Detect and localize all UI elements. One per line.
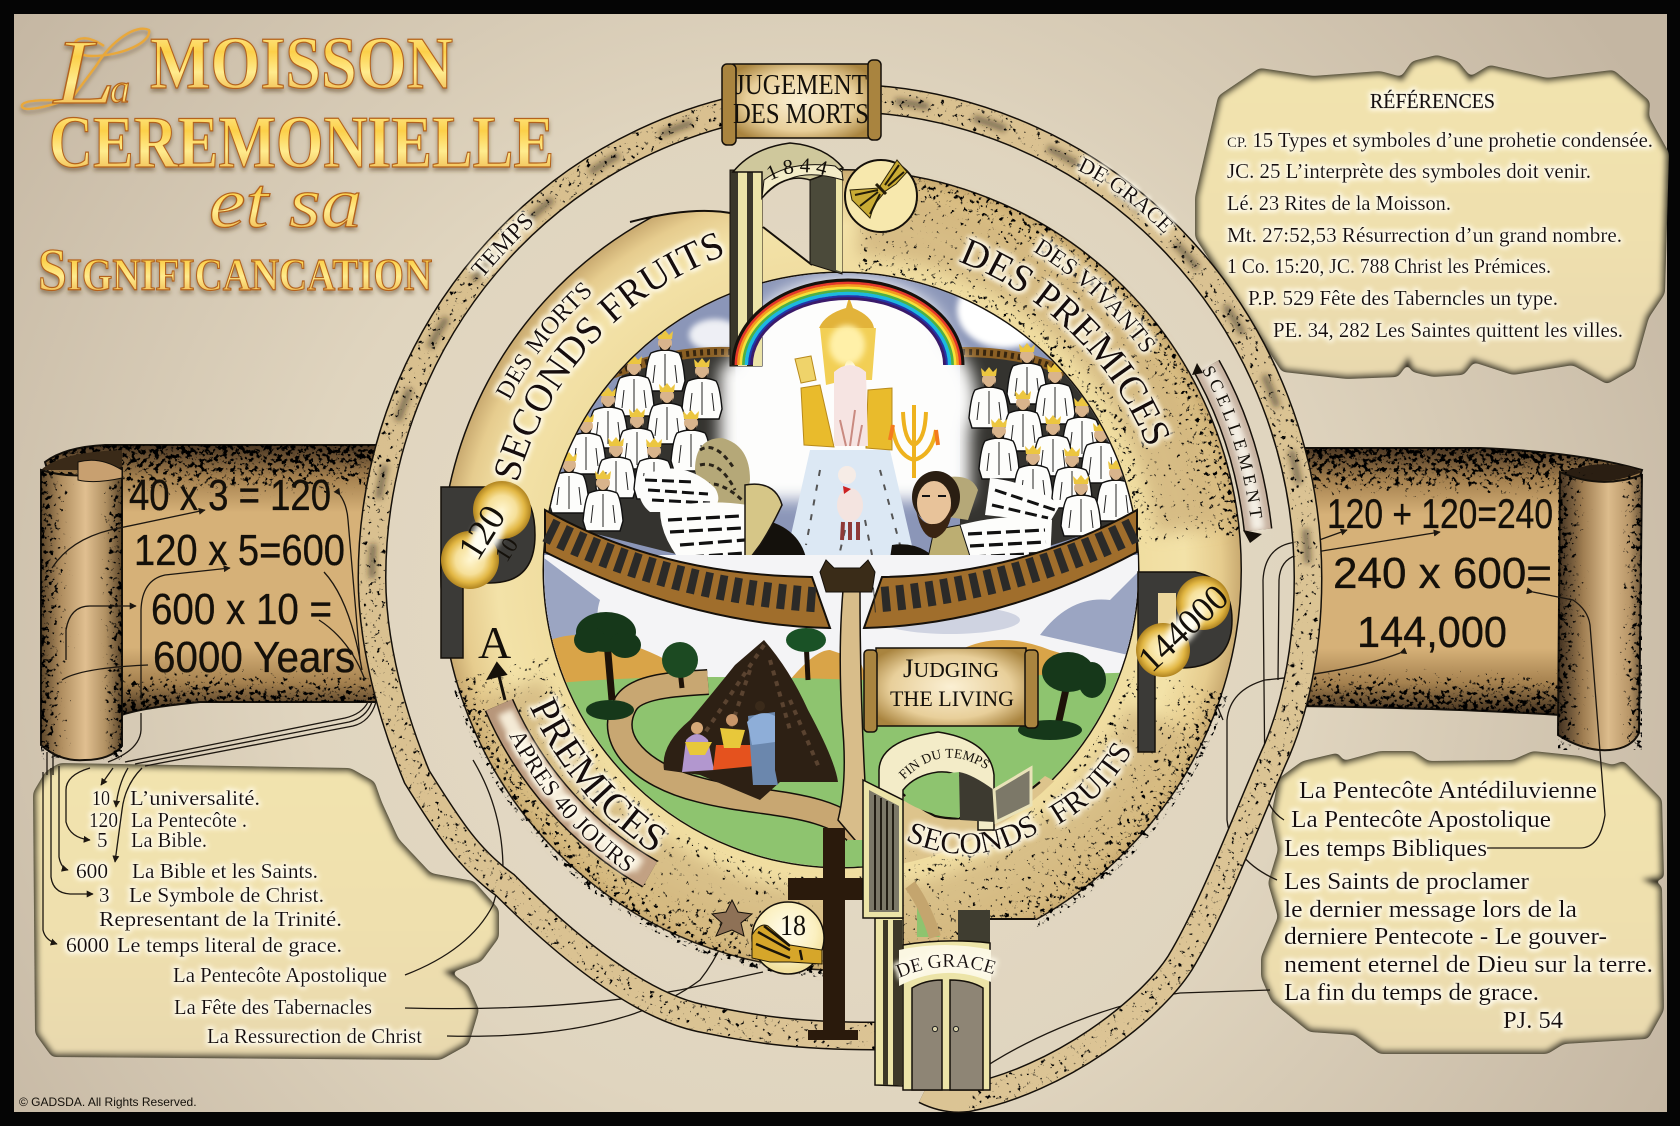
panel: references: PE. 34, 282 Les Saintes quittent les villes. xyxy=(1273,318,1623,342)
sky upper xyxy=(540,270,1150,570)
people at the hut xyxy=(682,701,778,785)
icon: wheat sheaf circle xyxy=(845,160,917,232)
star marker xyxy=(712,900,752,936)
letter P left with coins: 10 xyxy=(490,533,523,566)
panel: left key: La Bible et les Saints. xyxy=(132,859,318,883)
upper railings xyxy=(612,352,1065,374)
scroll: judging the living: THE LIVING xyxy=(890,686,1014,711)
cross xyxy=(788,828,863,1040)
scroll left: 120 x 5=600 xyxy=(134,526,345,575)
hut xyxy=(664,640,838,800)
icon: sheaf circle 18 xyxy=(752,902,824,974)
throne xyxy=(795,297,892,450)
dirt path xyxy=(620,682,862,838)
scroll: jugement des morts: JUGEMENT xyxy=(735,70,867,101)
scroll: judging the living: JUDGING xyxy=(903,654,999,683)
band labels: DES MORTS xyxy=(490,278,596,404)
inner harvest band xyxy=(492,170,1190,1004)
white glory cloud xyxy=(720,278,976,500)
central trunk xyxy=(838,590,872,860)
panel: left key: 3 xyxy=(99,883,110,907)
title flourish on the script L xyxy=(22,29,149,109)
icon: sheaf circle 18: 18 xyxy=(780,909,806,942)
central scene xyxy=(540,262,1150,900)
panel: left key: Le Symbole de Christ. xyxy=(129,883,324,907)
gate: fin du temps: FIN DU TEMPS xyxy=(896,746,992,782)
elders right xyxy=(969,343,1136,536)
ribbon: apres 40 jours: APRES 40 JOURS xyxy=(504,728,638,876)
title: SIGNIFICANCATION xyxy=(38,237,432,303)
panel: left key: 6000 xyxy=(66,933,109,957)
letter P left with coins: 120 xyxy=(450,498,514,567)
panel: references: P.P. 529 Fête des Taberncles un type. xyxy=(1248,286,1558,310)
panel: references: Lé. 23 Rites de la Moisson. xyxy=(1227,191,1451,215)
scroll left: 40 x 3 = 120 xyxy=(129,471,331,520)
background gap under cross xyxy=(845,900,1040,1004)
outer ring labels xyxy=(467,152,1179,283)
gate: de grace with doors xyxy=(863,780,998,1090)
letter P left with coins xyxy=(441,481,535,658)
panel: references: 1 Co. 15:20, JC. 788 Christ les Prémices. xyxy=(1227,254,1551,278)
panel: right key: derniere Pentecote - Le gouver- xyxy=(1284,924,1607,950)
wings left xyxy=(640,438,783,555)
green near gate xyxy=(847,840,864,880)
panel: right key: nement eternel de Dieu sur la terre. xyxy=(1284,952,1653,978)
panel: left key: La Ressurection de Christ xyxy=(207,1024,422,1048)
palm trees xyxy=(574,612,1106,740)
balustrade right xyxy=(864,510,1137,628)
scroll: jugement des morts: DES MORTS xyxy=(733,99,869,130)
wings right and creature xyxy=(951,476,1059,555)
candlestick xyxy=(890,405,938,478)
panel: left key: Le temps literal de grace. xyxy=(117,933,342,957)
portrait xyxy=(912,471,970,555)
balustrade left xyxy=(545,510,830,628)
title: CEREMONIELLE xyxy=(49,102,554,184)
panel: left key xyxy=(35,765,497,1058)
panel: left key: Representant de la Trinité. xyxy=(99,907,342,931)
band labels: SECONDS FRUITS xyxy=(490,228,727,486)
scroll right: 144,000 xyxy=(1357,608,1507,657)
panel: right key: Les temps Bibliques xyxy=(1284,836,1487,862)
hills xyxy=(552,635,667,690)
scroll left: 600 x 10 = xyxy=(151,585,332,634)
gate: fin du temps xyxy=(879,732,1031,830)
panel: left key: 600 xyxy=(76,859,108,883)
scroll left xyxy=(41,445,385,760)
band labels: SECONDS xyxy=(904,811,1042,860)
connector lines xyxy=(43,495,1605,1083)
title: MOISSON xyxy=(150,23,453,105)
panel: left key: 5 xyxy=(97,828,108,852)
letter A: A xyxy=(478,617,511,668)
dark backdrops behind elders xyxy=(550,356,736,554)
outer ring labels: TEMPS xyxy=(465,208,538,280)
background gap in arch opening xyxy=(630,170,812,264)
letter P right with coins: 144000 xyxy=(1130,577,1236,679)
lower sky xyxy=(540,555,1150,690)
panel: references: Mt. 27:52,53 Résurrection d’un grand nombre. xyxy=(1227,223,1622,247)
title xyxy=(22,21,554,303)
lamb xyxy=(837,466,863,540)
pale crystal floor xyxy=(792,450,912,555)
panel: left key: La Fête des Tabernacles xyxy=(174,995,372,1019)
elders left xyxy=(549,330,722,531)
scroll right: 240 x 600= xyxy=(1333,549,1552,598)
band labels: DES PREMICES xyxy=(954,232,1174,449)
heading: references: RÉFÉRENCES xyxy=(1370,89,1495,113)
panel: references: JC. 25 L’interprète des symboles doit venir. xyxy=(1227,159,1591,183)
ribbon: apres 40 jours xyxy=(489,664,650,878)
panel: left key: L’universalité. xyxy=(130,786,260,810)
title: L xyxy=(52,21,116,123)
panel: left key: 10 xyxy=(92,786,110,810)
bottom right band curl xyxy=(903,776,1090,944)
panel: right key: La Pentecôte Antédiluvienne xyxy=(1299,778,1597,804)
letter P right with coins xyxy=(1130,572,1236,752)
title: et sa xyxy=(209,163,362,243)
panel: right key: La fin du temps de grace. xyxy=(1284,980,1539,1006)
panel: right key: le dernier message lors de la xyxy=(1284,897,1577,923)
band labels xyxy=(485,223,1179,861)
dark shadow patches xyxy=(754,522,928,555)
balustrade center gate xyxy=(820,560,875,592)
panel: right key: La Pentecôte Apostolique xyxy=(1291,807,1551,833)
panel: references: CP. 15 Types et symboles d’une prohetie condensée. xyxy=(1227,128,1653,152)
panel: left key: 120 xyxy=(89,808,118,832)
band labels: DES VIVANTS xyxy=(1029,234,1161,357)
panel: left key: La Bible. xyxy=(131,828,207,852)
panel: right key: Les Saints de proclamer xyxy=(1284,869,1529,895)
scroll right: 120 + 120=240 xyxy=(1327,490,1553,537)
panel: references xyxy=(1197,57,1667,382)
gate: 1844 arch: 1844 xyxy=(767,158,827,180)
scroll: judging the living xyxy=(864,648,1038,732)
panel: left key: La Pentecôte . xyxy=(131,808,247,832)
panel: right key xyxy=(1263,753,1662,1052)
gate: 1844 arch xyxy=(730,143,843,366)
title: a xyxy=(110,66,130,111)
copyright: © GADSDA. All Rights Reserved. xyxy=(19,1095,197,1109)
outer ring labels: DE GRACE xyxy=(1074,152,1178,238)
band labels: PREMICES xyxy=(526,692,670,856)
panel: right key: PJ. 54 xyxy=(1503,1008,1563,1034)
band labels: FRUITS xyxy=(1044,738,1134,829)
outer time ring xyxy=(372,98,1308,1098)
rainbow xyxy=(734,281,962,365)
scroll: jugement des morts xyxy=(722,60,881,145)
ribbon: scellement: SCELLEMENT xyxy=(1202,366,1262,518)
panel: left key: La Pentecôte Apostolique xyxy=(173,963,387,987)
gate: de grace with doors: DE GRACE xyxy=(893,951,998,982)
scroll right xyxy=(1295,448,1642,750)
green ground xyxy=(566,672,1120,867)
scroll left: 6000 Years xyxy=(153,633,355,682)
